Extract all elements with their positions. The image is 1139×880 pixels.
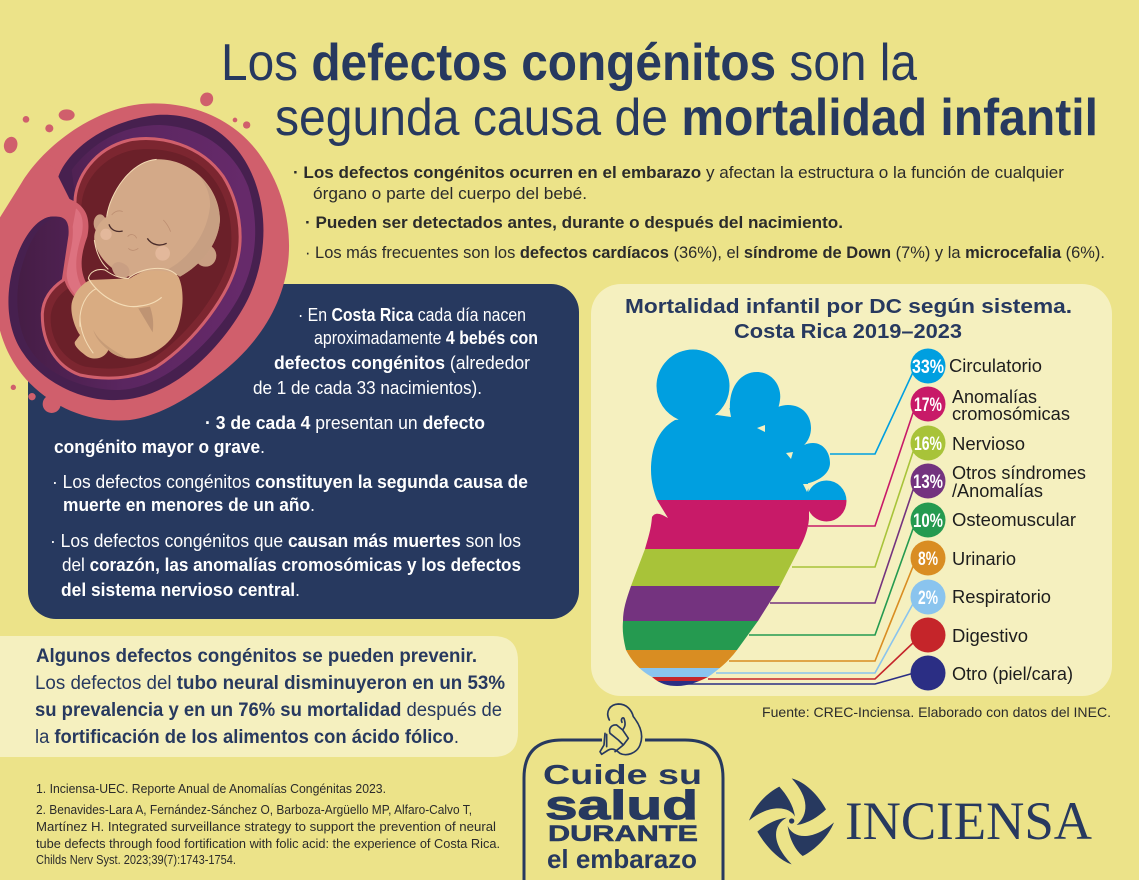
legend: circulatorio xyxy=(910,348,1042,384)
logo: Inciensa xyxy=(749,778,1092,864)
legend: anomalias cromosomicas: cromosómicas xyxy=(952,404,1070,424)
references: Childs Nerv Syst. 2023;39(7):1743-1754. xyxy=(36,852,236,867)
legend: respiratorio xyxy=(910,580,1051,614)
legend: anomalias cromosomicas xyxy=(910,386,1070,424)
legend: respiratorio: Respiratorio xyxy=(952,587,1051,607)
title: Los defectos congénitos son la xyxy=(221,34,917,92)
legend: osteomuscular xyxy=(910,502,1076,538)
legend: circulatorio: 33% xyxy=(912,357,944,378)
intro bullets: · Pueden ser detectados antes, durante o después del nacimiento. xyxy=(305,213,843,232)
legend: urinario xyxy=(910,540,1016,576)
panel: Costa Rica facts: muerte en menores de un año. xyxy=(63,495,315,515)
panel: Costa Rica facts: aproximadamente 4 bebés con xyxy=(314,328,538,348)
logo: Inciensa: INCIENSA xyxy=(845,791,1092,851)
panel: prevention message: la fortificación de los alimentos con ácido fólico. xyxy=(35,727,459,748)
purple layer xyxy=(8,115,263,400)
panel: Costa Rica facts: del sistema nervioso central. xyxy=(61,580,300,600)
legend: circulatorio: Circulatorio xyxy=(949,356,1042,376)
panel: prevention message: Algunos defectos congénitos se pueden prevenir. xyxy=(36,646,477,667)
source note: Fuente: CREC-Inciensa. Elaborado con datos del INEC. xyxy=(762,704,1111,720)
illustration: fetus in womb xyxy=(0,90,289,420)
splatter drops xyxy=(2,90,250,413)
leader lines xyxy=(680,370,914,684)
legend: nervioso xyxy=(910,426,1025,460)
intro bullets xyxy=(293,163,1105,262)
legend: respiratorio: 2% xyxy=(918,588,938,609)
legend: urinario: Urinario xyxy=(952,549,1016,569)
foot bars xyxy=(622,350,846,686)
legend: nervioso: Nervioso xyxy=(952,434,1025,454)
chart title xyxy=(625,296,1072,343)
panel: Costa Rica facts: de 1 de cada 33 nacimientos). xyxy=(253,378,482,398)
intro bullets: · Los más frecuentes son los defectos cardíacos (36%), el síndrome de Down (7%) y la microcefalia (6%). xyxy=(305,243,1105,262)
baby xyxy=(71,159,220,359)
legend: otro xyxy=(910,656,1073,690)
icon: fetus xyxy=(600,704,642,755)
panel: Costa Rica facts: defectos congénitos (alrededor xyxy=(274,353,530,373)
legend: otros sindromes: 13% xyxy=(913,472,943,493)
legend: anomalias cromosomicas: Anomalías xyxy=(952,387,1037,407)
legend: urinario: 8% xyxy=(918,549,938,570)
title: segunda causa de mortalidad infantil xyxy=(275,89,1098,147)
panel: Costa Rica facts: congénito mayor o grave. xyxy=(54,437,265,457)
references: tube defects through food fortification with folic acid: the experience of Costa Rica. xyxy=(36,836,500,851)
campaign badge: el embarazo xyxy=(547,844,697,874)
umbilical cord and placenta fold xyxy=(0,165,91,303)
campaign badge xyxy=(524,704,723,880)
legend: osteomuscular: Osteomuscular xyxy=(952,510,1076,530)
panel: prevention message: su prevalencia y en un 76% su mortalidad después de xyxy=(35,700,502,721)
legend: otro: Otro (piel/cara) xyxy=(952,664,1073,684)
uterus outer wall xyxy=(0,103,289,420)
panel: Costa Rica facts: · Los defectos congénitos constituyen la segunda causa de xyxy=(52,472,528,492)
legend: otros sindromes xyxy=(910,463,1086,501)
panel: prevention message xyxy=(0,636,518,757)
chart title: Mortalidad infantil por DC según sistema. xyxy=(625,296,1072,318)
panel: Costa Rica facts: · En Costa Rica cada día nacen xyxy=(298,305,526,325)
campaign badge: salud xyxy=(545,782,698,828)
chart title: Costa Rica 2019–2023 xyxy=(734,321,962,343)
panel: prevention message: Los defectos del tubo neural disminuyeron en un 53% xyxy=(35,673,505,694)
intro bullets: · Los defectos congénitos ocurren en el embarazo y afectan la estructura o la función de cualquier xyxy=(293,163,1064,182)
icon: pinwheel xyxy=(749,778,834,864)
legend: anomalias cromosomicas: 17% xyxy=(914,395,942,416)
campaign badge: DURANTE xyxy=(548,821,698,846)
legend: digestivo: Digestivo xyxy=(952,626,1028,646)
legend: digestivo xyxy=(910,618,1028,652)
legend: otros sindromes: Otros síndromes xyxy=(952,463,1086,483)
panel: Costa Rica facts xyxy=(28,284,579,619)
panel: mortality chart xyxy=(591,284,1112,696)
references: 1. Inciensa-UEC. Reporte Anual de Anomalías Congénitas 2023. xyxy=(36,781,386,796)
legend: nervioso: 16% xyxy=(914,434,942,455)
legend: osteomuscular: 10% xyxy=(913,511,943,532)
references xyxy=(36,781,500,867)
legend: otros sindromes: /Anomalías xyxy=(952,481,1043,501)
title xyxy=(221,34,1098,147)
intro bullets: órgano o parte del cuerpo del bebé. xyxy=(313,184,587,203)
amniotic sac xyxy=(42,139,240,378)
panel: Costa Rica facts: del corazón, las anomalías cromosómicas y los defectos xyxy=(62,555,521,575)
references: 2. Benavides-Lara A, Fernández-Sánchez O, Barboza-Argüello MP, Alfaro-Calvo T, xyxy=(36,802,472,817)
references: Martínez H. Integrated surveillance strategy to support the prevention of neural xyxy=(36,819,496,834)
panel: Costa Rica facts: · Los defectos congénitos que causan más muertes son los xyxy=(50,531,521,551)
panel: Costa Rica facts: · 3 de cada 4 presentan un defecto xyxy=(205,413,485,433)
campaign badge: Cuide su xyxy=(543,759,702,790)
